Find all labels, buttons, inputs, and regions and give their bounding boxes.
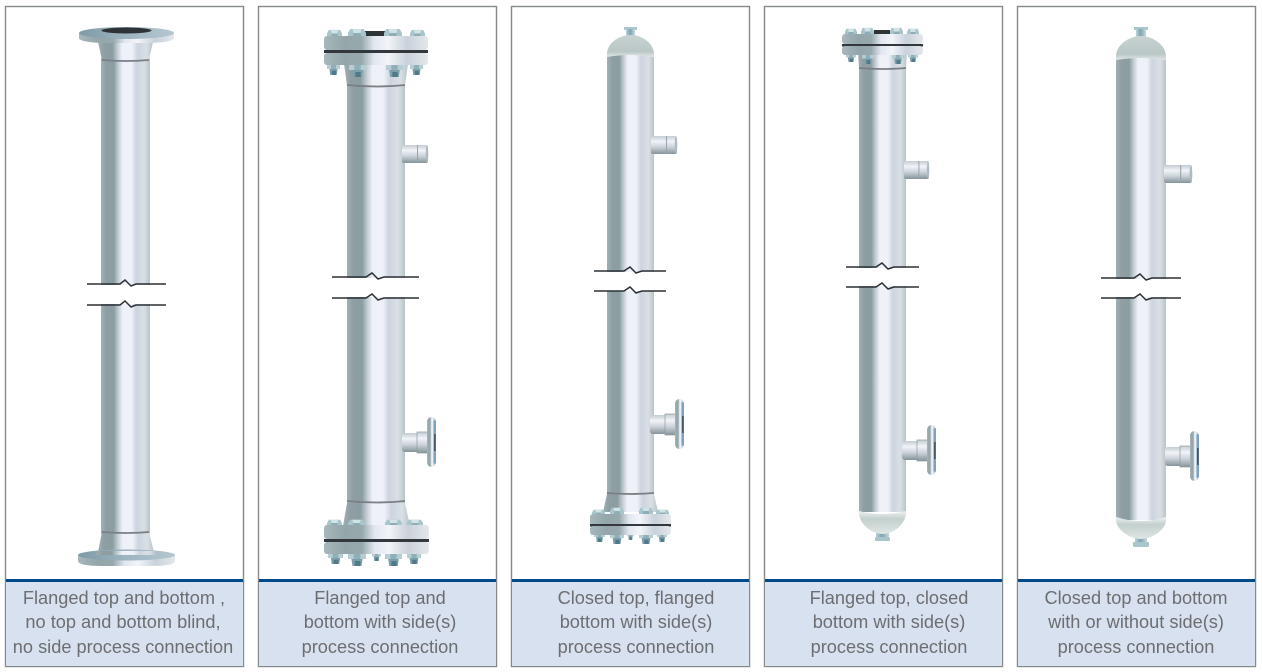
caption band: Flanged top and [314,588,446,608]
caption band: bottom with side(s) [813,612,965,632]
vessel: bolted top flange, domed bottom [842,28,936,541]
caption band: process connection [558,637,714,657]
caption band: bottom with side(s) [560,612,712,632]
caption band [1018,579,1255,666]
caption band [6,579,243,666]
caption band: process connection [811,637,967,657]
vessel: bolted flanges with two side stubs [324,29,436,566]
panel: closed top, flanged bottom [512,6,750,666]
vessel: domed top and bottom [1101,27,1199,547]
panel: flanged top and bottom, no side connection [6,6,244,666]
caption band [259,579,496,666]
caption band [765,579,1002,666]
panel: flanged top and bottom with side connections [258,6,496,666]
caption band: Closed top, flanged [558,588,714,608]
caption band: with or without side(s) [1047,612,1224,632]
caption band: Flanged top and bottom , [23,588,225,608]
caption band: process connection [302,637,458,657]
panel: flanged top, closed bottom [764,6,1002,666]
caption band [512,579,749,666]
caption band: process connection [1058,637,1214,657]
panel: closed top and bottom [1018,6,1256,666]
vessel: pipe with two plain flanges [78,27,175,566]
caption band: Flanged top, closed [810,588,968,608]
caption band: no side process connection [13,637,233,657]
vessel: domed top, bolted bottom flange [590,27,684,544]
caption band: Closed top and bottom [1044,588,1228,608]
caption band: bottom with side(s) [304,612,456,632]
caption band: no top and bottom blind, [25,612,221,632]
